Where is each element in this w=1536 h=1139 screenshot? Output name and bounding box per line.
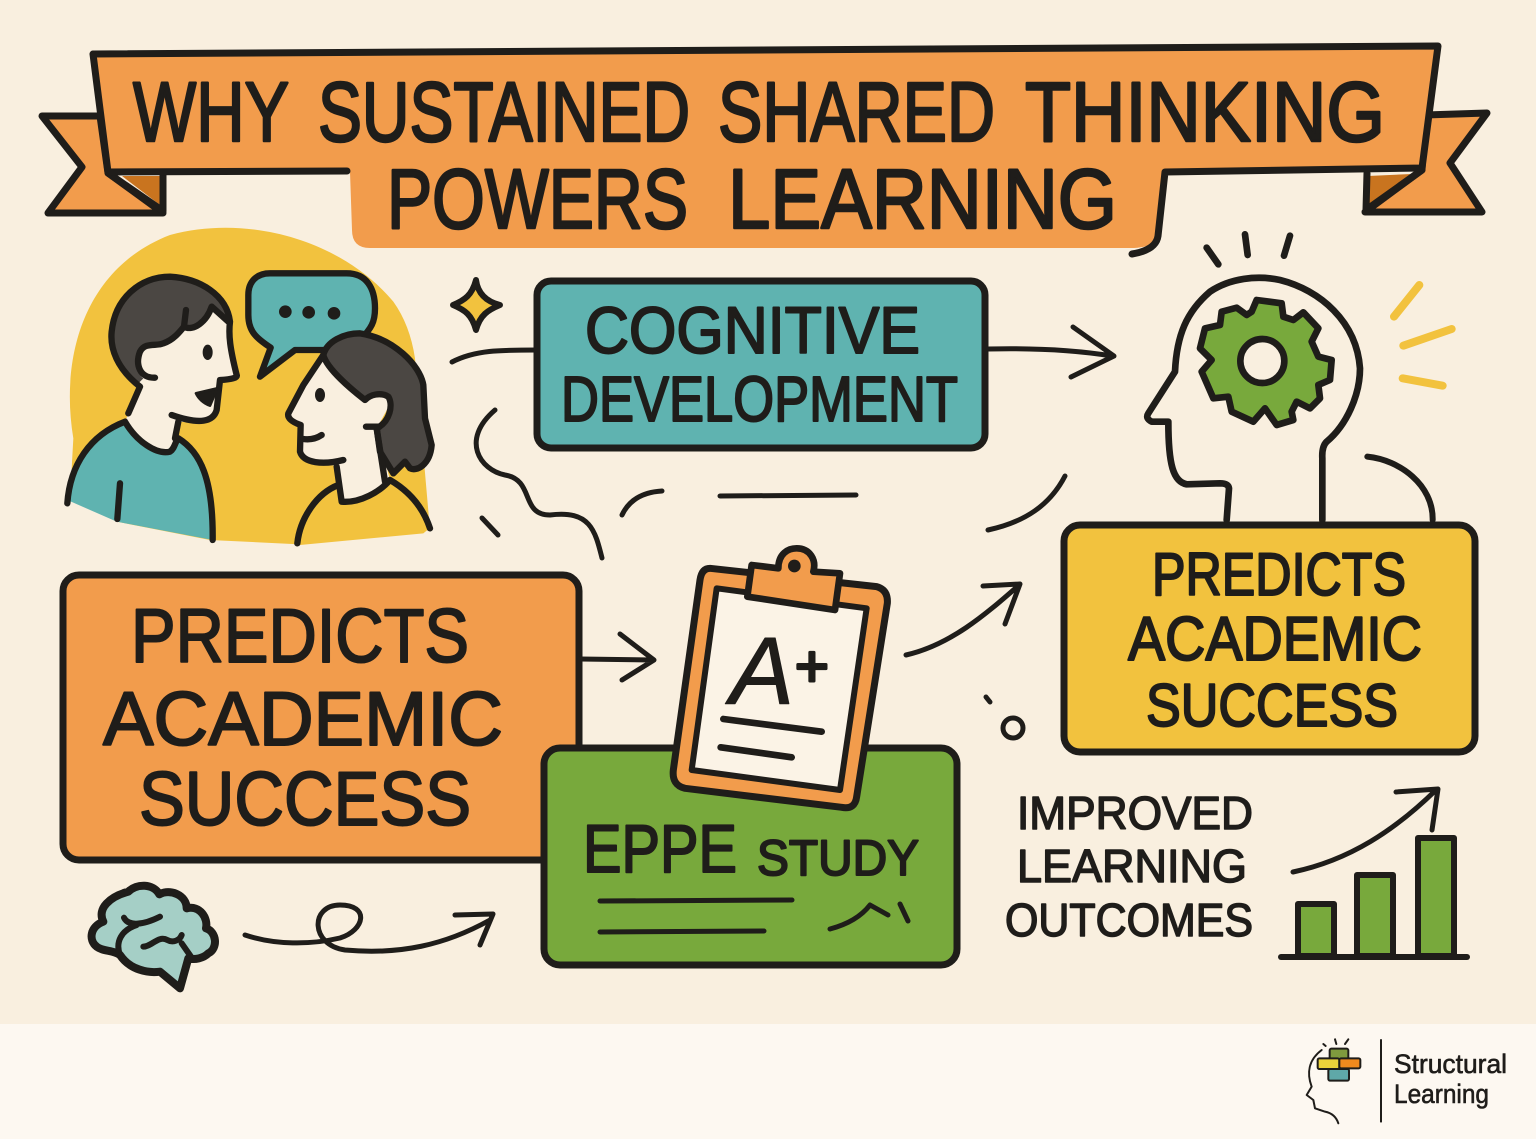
- panel: predicts academic success (yellow): SUCCESS: [1146, 672, 1398, 739]
- panel: cognitive development: COGNITIVE: [585, 293, 920, 367]
- arrow: academic success to clipboard: [580, 634, 654, 680]
- text: improved learning outcomes: OUTCOMES: [1005, 894, 1253, 946]
- text: improved learning outcomes: IMPROVED: [1017, 787, 1253, 839]
- panel: predicts academic success (orange): PREDICTS: [131, 594, 469, 679]
- icon: head with gear: [1147, 234, 1452, 520]
- panel: EPPE study: STUDY: [757, 830, 919, 886]
- icon: clipboard with A+: +: [795, 634, 829, 699]
- icon: clipboard with A+: [673, 548, 887, 808]
- person: woman: [288, 333, 432, 545]
- icon: clipboard with A+: A: [725, 618, 794, 725]
- panel: predicts academic success (yellow): ACADEMIC: [1128, 605, 1422, 674]
- title banner: SHARED: [718, 65, 995, 159]
- panel: EPPE study: [544, 748, 957, 965]
- logo: Structural Learning: Structural: [1394, 1049, 1507, 1079]
- panel: predicts academic success (orange): ACADEMIC: [103, 677, 503, 762]
- logo: Structural Learning: Learning: [1394, 1079, 1489, 1109]
- logo: Structural Learning: [1307, 1039, 1507, 1123]
- arrow: development to head: [988, 327, 1114, 377]
- connector: into cognitive development: [452, 350, 537, 362]
- title banner: LEARNING: [728, 152, 1117, 246]
- panel: predicts academic success (orange): SUCCESS: [139, 757, 471, 842]
- panel: cognitive development: [537, 281, 985, 448]
- illustration: two people talking: [67, 228, 432, 545]
- icon: brain: [92, 886, 215, 988]
- speech bubble: [248, 273, 375, 377]
- bar chart: rising outcomes: [1281, 789, 1467, 957]
- panel: predicts academic success (yellow): PREDICTS: [1152, 541, 1406, 608]
- person: man: [67, 277, 238, 540]
- title banner: [42, 46, 1487, 254]
- decorative squiggles: [476, 410, 1065, 702]
- arrow: clipboard to yellow panel: [906, 584, 1020, 655]
- panel: cognitive development: DEVELOPMENT: [561, 363, 958, 435]
- panel: predicts academic success (orange): [63, 575, 579, 860]
- title banner: THINKING: [1025, 65, 1385, 159]
- title banner: SUSTAINED: [318, 65, 690, 159]
- text: improved learning outcomes: [1005, 787, 1253, 946]
- arrow: brain to EPPE: [245, 905, 493, 951]
- title banner: WHY: [133, 65, 288, 159]
- gear: [1200, 300, 1332, 425]
- title banner: POWERS: [387, 152, 688, 246]
- text: improved learning outcomes: LEARNING: [1017, 840, 1247, 892]
- panel: predicts academic success (yellow): [1064, 525, 1475, 752]
- icon: sparkle: [453, 280, 500, 330]
- panel: EPPE study: EPPE: [583, 811, 737, 887]
